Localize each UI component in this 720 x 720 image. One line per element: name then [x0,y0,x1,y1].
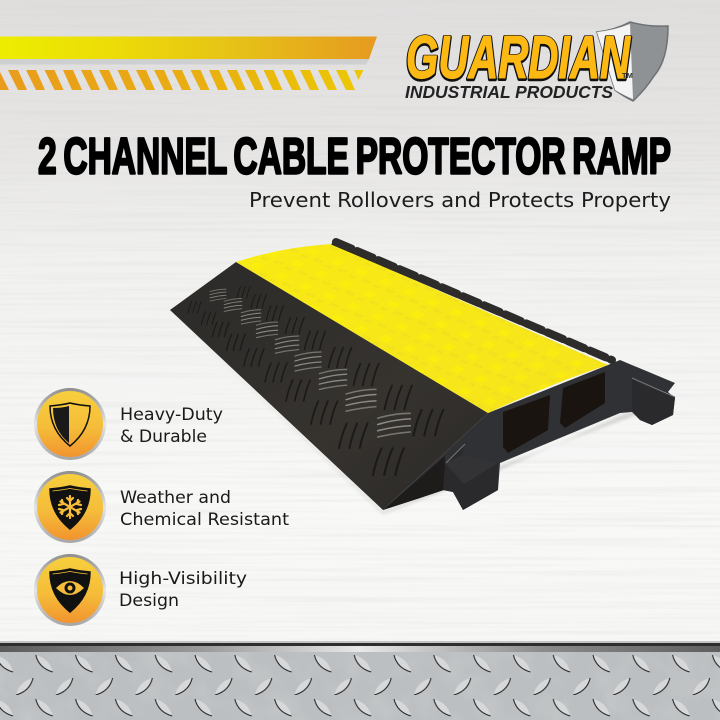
feature text: High-Visibility [119,569,247,588]
subtitle: Prevent Rollovers and Protects Property [249,188,671,212]
logo shield [597,22,668,101]
ramp shadow [170,312,675,514]
front lug [443,444,498,510]
feature: heavy-duty and durable [34,388,223,460]
logo tagline: INDUSTRIAL PRODUCTS [405,82,613,102]
feature text: Weather and [120,488,231,507]
end face [383,360,675,510]
trademark: TM [622,71,633,80]
feature text: Heavy-Duty [120,405,223,424]
logo wordmark: GUARDIAN [406,25,631,92]
feature: weather and chemical resistant [34,471,290,543]
black rubber ramp [170,262,488,510]
channel openings [503,372,605,453]
header yellow bar with hazard stripes [0,36,377,90]
footer: diamond plate [0,641,720,720]
feature text: Chemical Resistant [120,510,290,529]
logo: Guardian Industrial Products: GUARDIAN [406,24,631,91]
badge: eye shield [34,554,106,626]
badge: snowflake shield [34,471,106,543]
rear lug [632,378,675,425]
yellow lid moulded pattern [236,244,608,413]
hinge teeth along rear edge [332,242,612,362]
diamond tread on ramp [188,287,443,475]
yellow cable cover lid [236,244,608,413]
feature: high-visibility design [34,554,247,626]
feature text: & Durable [120,427,207,446]
product: cable protector ramp [170,242,675,514]
feature text: Design [119,591,179,610]
badge: half shield [34,388,106,460]
ramp underside wedge [383,456,445,510]
